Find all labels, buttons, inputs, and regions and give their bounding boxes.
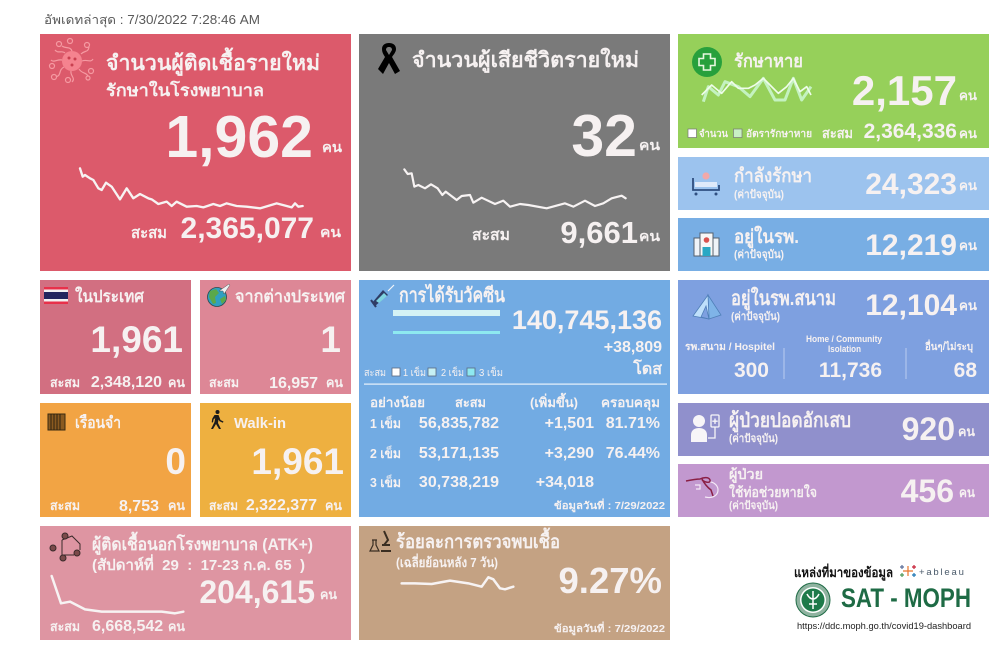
panel: vaccination [359,280,670,517]
subheading: (สัปดาห์ที่ 29 : 17-23 ก.ค. 65 ) [92,554,305,574]
panel: recovered [678,34,989,148]
breakdown: home isolation [806,334,882,382]
source label: แหล่งที่มาของข้อมูล [794,563,893,581]
breakdown: hospitel [685,342,775,382]
cumulative value: 2,365,077 [181,212,314,245]
cumulative label: สะสม [50,619,80,634]
subheading: (เฉลี่ยย้อนหลัง 7 วัน) [396,553,498,570]
legend: อัตรารักษาหาย [746,128,812,140]
unit: คน [639,137,660,153]
unit: คน [168,498,185,513]
icon: walking person [211,410,224,429]
row: dose 2: 2 เข็ม [370,444,401,461]
icon: Thai flag [44,287,68,304]
cumulative value: 9,661 [560,215,638,250]
value: daily doses: +38,809 [604,339,662,356]
bars: dose coverage [393,310,500,334]
row: dose 3 [370,473,594,491]
panel: new deaths [359,34,670,271]
subheading: รักษาในโรงพยาบาล [106,80,264,100]
cumulative value: 8,753 [119,498,159,515]
panel: domestic [40,280,191,394]
heading: ในประเทศ [75,286,145,306]
unit: คน [639,228,660,244]
panel: from abroad [200,280,351,394]
heading: จากต่างประเทศ [235,287,346,306]
legend [364,365,503,379]
unit: คน [959,126,977,141]
icon: ventilator tube [686,478,718,498]
heading: รักษาหาย [734,51,803,71]
line chart: positivity trend [400,576,515,591]
heading: ผู้ติดเชื้อนอกโรงพยาบาล (ATK+) [92,531,313,556]
panel: under treatment [678,157,989,210]
unit: คน [325,498,342,513]
breakdown: other: 68 [954,359,977,382]
unit: คน [326,375,343,390]
unit: คน [168,619,185,634]
heading: การได้รับวัคซีน [399,283,505,307]
unit: คน [322,139,342,155]
cumulative label: สะสม [472,227,510,244]
row: dose 1: 1 เข็ม [370,414,401,431]
table header: ครอบคลุม [601,395,660,411]
value: new cases: 1,962 [165,104,313,170]
row: dose 1: 56,835,782 [419,415,499,432]
subheading: (ค่าปัจจุบัน) [734,248,784,262]
cumulative value: 16,957 [269,375,318,392]
row: dose 3: 3 เข็ม [370,473,401,490]
heading: จำนวนผู้เสียชีวิตรายใหม่ [412,47,639,74]
breakdown: home isolation: Home / Community [806,334,882,344]
heading: ร้อยละการตรวจพบเชื้อ [396,527,560,553]
breakdown: other [925,339,977,382]
row: dose 1: 81.71% [606,415,660,432]
row: dose 2: +3,290 [545,445,594,462]
value: 1,961 [90,319,183,360]
row: dose 2: 53,171,135 [419,445,499,462]
value: 0 [165,441,186,482]
icon: home network [50,533,80,561]
cumulative label: สะสม [822,125,853,141]
row: dose 3: 30,738,219 [419,474,499,491]
table header: สะสม [455,395,486,410]
unit: คน [959,485,975,500]
icon: virus [50,38,94,82]
heading: อยู่ในรพ.สนาม [731,286,836,312]
icon: ministry emblem [796,583,830,617]
subheading: (ค่าปัจจุบัน) [729,499,778,513]
data date: ข้อมูลวันที่ : 7/29/2022 [554,621,665,636]
source url: https://ddc.moph.go.th/covid19-dashboard [797,621,971,632]
cumulative value: 2,348,120 [91,374,162,391]
panel: prison [40,403,191,517]
unit: คน [959,238,977,253]
icon: patient with IV [691,415,719,442]
breakdown: other: อื่นๆ/ไม่ระบุ [925,339,973,353]
cumulative value: 6,668,542 [92,618,163,635]
heading: ผู้ป่วยปอดอักเสบ [729,409,851,434]
value: new deaths: 32 [571,103,637,169]
icon: tent [693,295,721,319]
heading: เรือนจำ [75,414,121,432]
icon: syringe [371,285,394,307]
panel: ventilator [678,464,989,517]
unit: คน [959,298,977,313]
table header: อย่างน้อย [370,395,425,410]
icon: microscope and flask [370,531,391,551]
row: dose 3: +34,018 [536,474,594,491]
heading: จำนวนผู้ติดเชื้อรายใหม่ [106,47,320,77]
row: dose 2: 76.44% [606,445,660,462]
last updated timestamp: อัพเดทล่าสุด : 7/30/2022 7:28:46 AM [44,13,260,28]
heading line 1: ผู้ป่วย [729,466,763,483]
legend [688,128,812,140]
panel: in hospital [678,218,989,271]
value: 456 [901,473,954,509]
value: recovered: 2,157 [852,67,957,114]
panel: walk-in [200,403,351,517]
data date: ข้อมูลวันที่ : 7/29/2022 [554,498,665,513]
table header [370,392,660,411]
cumulative label: สะสม [50,375,80,390]
breakdown: home isolation: Isolation [828,344,861,354]
line chart: recovered trend [701,76,812,102]
unit: คน [320,587,337,602]
row: dose 1 [370,414,660,432]
icon: hospital building [694,233,719,256]
legend: 3 เข็ม [479,365,503,379]
breakdown: hospitel: รพ.สนาม / Hospitel [685,342,775,353]
breakdown: home isolation: 11,736 [819,359,882,382]
line chart: ATK trend [50,574,185,615]
value: 9.27% [558,560,662,601]
cumulative value: 2,322,377 [246,497,317,514]
tableau wordmark: +ableau [919,567,966,578]
value: 24,323 [865,168,957,201]
heading: กำลังรักษา [734,166,812,187]
value: 12,219 [865,229,957,262]
cumulative label: สะสม [209,375,239,390]
cumulative label: สะสม [50,498,80,513]
line chart: deaths trend [403,168,627,210]
panel: new hospital cases [40,34,351,271]
cumulative value: 2,364,336 [864,120,957,143]
cumulative label: สะสม [209,498,238,513]
subheading: (ค่าปัจจุบัน) [731,310,780,324]
table header: (เพิ่มขึ้น) [530,392,578,410]
row: dose 2 [370,444,660,462]
value: 204,615 [199,574,315,610]
heading line 2: ใช้ท่อช่วยหายใจ [729,483,817,500]
line chart: cases trend [78,167,304,210]
logo text: SAT - MOPH [841,583,971,613]
legend: สะสม [364,368,386,379]
value: 1 [320,319,341,360]
legend: 1 เข็ม [403,365,426,379]
icon: black ribbon [378,43,400,74]
legend: จำนวน [699,128,728,140]
icon: tableau mark [900,565,916,577]
value: total doses: 140,745,136 [512,305,662,335]
row: dose 1: +1,501 [545,415,594,432]
heading: อยู่ในรพ. [734,225,799,249]
subheading: (ค่าปัจจุบัน) [729,432,778,446]
unit: คน [959,88,977,103]
unit: คน [959,178,977,193]
panel: pneumonia [678,403,989,456]
unit: คน [168,375,185,390]
subheading: (ค่าปัจจุบัน) [734,188,784,202]
unit: คน [320,224,341,240]
icon: green cross [692,47,722,77]
panel: field hospital [678,280,989,394]
icon: hospital bed [693,172,719,196]
unit: โดส [632,358,662,378]
heading: Walk-in [234,415,286,432]
panel: positivity rate [359,526,670,640]
source block [794,563,971,632]
legend: 2 เข็ม [441,365,464,379]
icon: globe with plane [208,284,230,306]
panel: ATK outside hospital [40,526,351,640]
unit: คน [958,424,975,439]
icon: jail door [48,414,65,430]
value: 920 [902,411,955,447]
value: 12,104 [865,289,957,322]
table: doses [370,392,660,491]
breakdown: hospitel: 300 [734,359,769,382]
cumulative label: สะสม [131,225,167,242]
value: 1,961 [251,441,344,482]
